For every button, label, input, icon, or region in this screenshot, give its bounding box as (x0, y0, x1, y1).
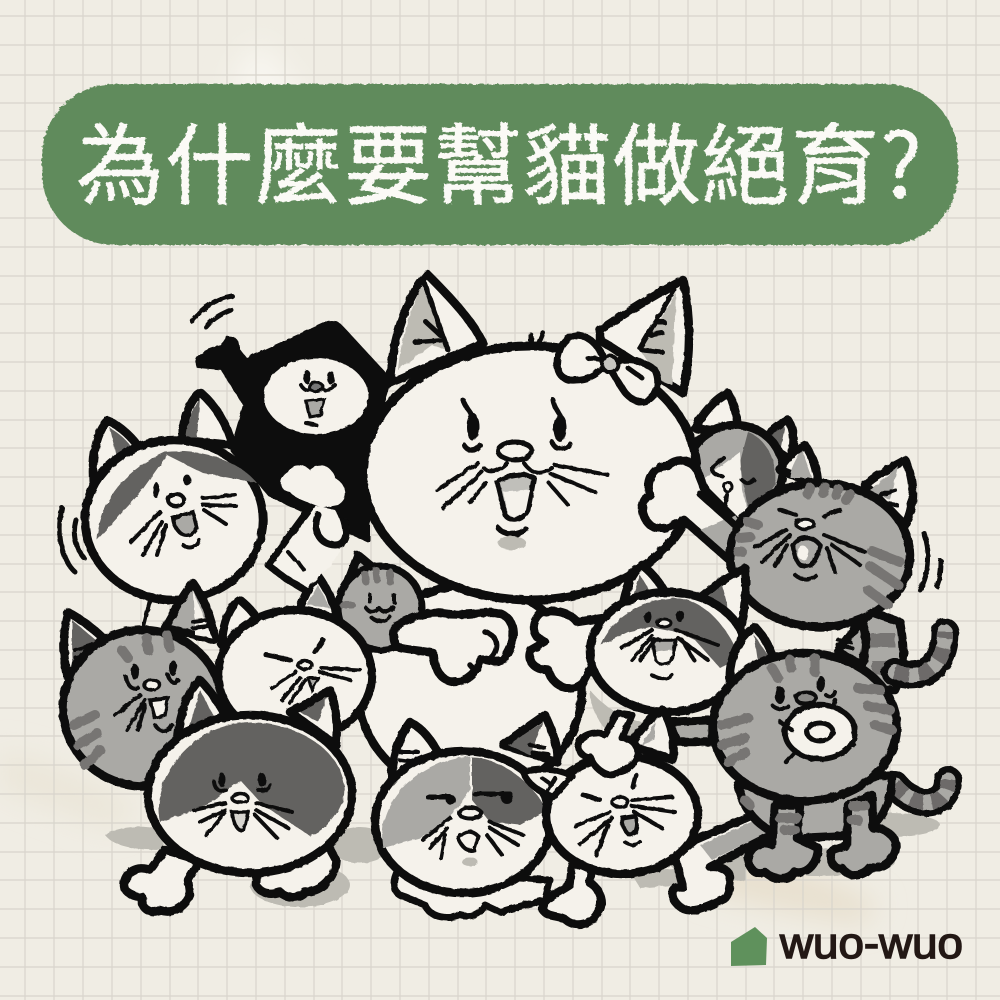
upper tabby leg (855, 610, 903, 690)
cat illustration (60, 274, 948, 924)
small calico, top right (687, 393, 794, 522)
bottom calico paws (394, 870, 550, 918)
black cat (197, 323, 390, 540)
white cat, left centre (218, 576, 372, 740)
calico cat, bottom centre (375, 715, 557, 918)
small grey cat behind (338, 555, 422, 650)
tuxedo paws (124, 850, 200, 912)
black cat face (264, 358, 368, 434)
big cat left paw (394, 612, 513, 682)
big white cat lower body (358, 585, 582, 795)
logo house icon (731, 927, 767, 966)
upper right tabby cat (642, 445, 912, 627)
lower tabby body (738, 775, 892, 838)
big white cat (363, 274, 697, 688)
small white cat right leg (672, 812, 770, 910)
logo wordmark: wuo-wuo (779, 919, 963, 968)
logo (731, 919, 963, 968)
title banner (42, 84, 958, 245)
big cat face (463, 400, 570, 450)
tuxedo cat, lower left (124, 680, 352, 912)
donut (785, 705, 855, 759)
calico cat, top left (85, 393, 263, 600)
tabby cat with donut, lower right (668, 622, 897, 910)
black cat paw and arm (268, 465, 346, 590)
limb behind (668, 720, 712, 742)
tabby tails and rear legs (855, 610, 948, 802)
raised arm of big cat (642, 460, 765, 572)
mid cat hanging paw (578, 713, 638, 775)
lower tabby tail (895, 780, 948, 802)
calico face (152, 482, 160, 498)
big cat right paw (530, 611, 610, 688)
big cat bow (557, 335, 658, 402)
donut cat eyes and nose (775, 686, 785, 704)
upper tabby tail (895, 632, 945, 675)
calico cat, middle right (590, 565, 746, 712)
upper tabby face (780, 510, 840, 516)
small white cat front leg (543, 865, 601, 924)
tabby cat, left (63, 583, 223, 786)
grey floor shadows (105, 690, 940, 907)
title text: 為什麼要幫貓做絕育? (76, 96, 922, 223)
small white cat, bottom (523, 710, 698, 924)
big cat ears (390, 274, 483, 383)
motion lines (60, 296, 941, 590)
